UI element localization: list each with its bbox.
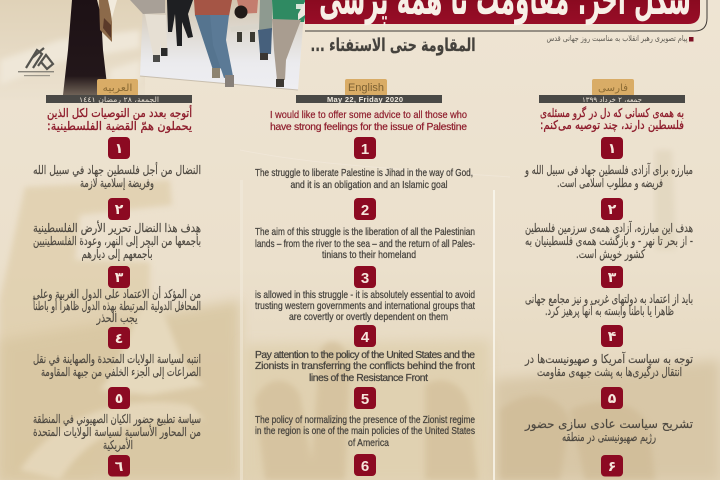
item 3: are covertly or overtly dependent on them <box>289 312 448 323</box>
item 1: and it is an obligation and an Islamic goal <box>290 180 448 191</box>
item 6: 6 <box>361 458 369 475</box>
item 6 <box>354 454 376 476</box>
item 5: سياسة تطبيع حضور الكيان الصهيوني في المنطقة <box>33 412 201 427</box>
item 1: 1 <box>361 141 369 158</box>
item 4: ۴ <box>608 329 617 345</box>
logo <box>18 48 54 76</box>
panel: Persian column <box>524 79 693 476</box>
person: second jeans with striped shirt <box>258 0 272 60</box>
language tab <box>345 79 387 96</box>
intro: I would like to offer some advice to all those who <box>270 110 467 121</box>
date bar <box>46 95 192 104</box>
item 4: انتبه لسياسة الولايات المتحدة والصهاينة في نقل <box>33 352 201 367</box>
item 2: ۲ <box>608 202 617 218</box>
person: jeans carrying stretcher <box>194 0 234 87</box>
item 1 <box>255 137 473 191</box>
item 5 <box>524 387 693 445</box>
item 3: ٣ <box>115 270 124 286</box>
intro: have strong feelings for the issue of Palestine <box>270 122 467 133</box>
person: dark trousers <box>167 0 193 46</box>
intro <box>540 106 684 133</box>
language tab <box>97 79 138 96</box>
intro <box>47 105 192 134</box>
item 1: فریضه و مطلوب اسلامی است. <box>557 176 663 191</box>
item 1 <box>524 137 693 191</box>
intro: يحملون همّ القضية الفلسطينية: <box>47 119 192 134</box>
item 3: من المؤكد أن الاعتماد على الدول الغربية وعلى <box>33 286 201 302</box>
item 3: trusting western governments and international groups that <box>255 301 475 312</box>
item 6 <box>108 455 130 476</box>
item 5: 5 <box>361 391 369 408</box>
item 3 <box>525 266 693 319</box>
language tab: العربيه <box>102 83 132 94</box>
item 2 <box>255 198 475 261</box>
item 3: يجب الحذر <box>96 311 138 326</box>
item 3 <box>255 266 475 323</box>
item 5: رژیم صهیونیستی در منطقه <box>562 430 656 445</box>
item 4: ٤ <box>115 331 123 347</box>
date bar: May 22, Friday 2020 <box>327 95 403 104</box>
item 1: ۱ <box>608 141 616 157</box>
item 6 <box>601 455 623 476</box>
date bar: جمعه، ۲ خرداد ۱۳۹۹ <box>582 96 642 104</box>
item 4 <box>255 325 475 384</box>
item 3: 3 <box>361 270 369 287</box>
photo: woman in black with flag <box>63 0 117 95</box>
item 5: من المحاور الأساسية لسياسة الولايات المتحدة <box>33 424 201 440</box>
panel: Arabic column <box>33 79 201 476</box>
person: white trousers <box>130 0 168 62</box>
item 5: in the region is one of the main policies of the United States <box>255 426 475 437</box>
intro: فلسطین دارند، چند توصیه می‌کنم: <box>540 118 684 133</box>
item 2: lands – from the river to the sea – and the return of all Pales- <box>255 239 475 250</box>
item 1: The struggle to liberate Palestine is Jihad in the way of God, <box>255 168 473 179</box>
intro: أتوجه بعدد من التوصيات لكل الذين <box>47 105 192 121</box>
item 2: tinians to their homeland <box>322 250 416 261</box>
item 5: تشریح سیاست عادی سازی حضور <box>524 417 693 432</box>
person: green vest <box>272 0 316 87</box>
item 2: ٢ <box>115 202 124 218</box>
item 2 <box>33 198 201 262</box>
item 4 <box>33 327 201 380</box>
caption with bullet: پیام تصویری رهبر انقلاب به مناسبت روز جهانی قدس <box>546 34 688 43</box>
item 4: lines of the Resistance Front <box>309 373 428 384</box>
item 4: Zionists in transferring the conflicts behind the front <box>255 361 475 372</box>
item 3: is allowed in this struggle - it is absolutely essential to avoid <box>255 290 475 301</box>
item 4: الصراعات إلى الجزء الخلفي من جبهة المقاومة <box>41 365 201 380</box>
language tab <box>592 79 634 96</box>
item 2 <box>525 198 693 262</box>
item 2: کشور خویش است. <box>576 247 645 262</box>
item 3: المحافل الدولية المرتبطة بهذه الدول ظاهراً أو باطناً <box>33 297 201 314</box>
item 4: Pay attention to the policy of the United States and the <box>255 350 475 361</box>
item 3: ۳ <box>608 270 617 286</box>
item 2: بأجمعها من البحر إلى النهر، وعودة الفلسطينيين <box>33 232 201 249</box>
intro <box>270 110 467 133</box>
subtitle: المقاومة حتى الاستفتاء ... <box>310 35 476 56</box>
item 5: The policy of normalizing the presence of the Zionist regime <box>255 415 475 426</box>
item 5: ۵ <box>608 391 617 407</box>
item 5 <box>255 387 475 449</box>
patient on stretcher <box>230 0 264 42</box>
item 6: ٦ <box>115 459 124 475</box>
item 2: بأجمعهم إلى ديارهم <box>82 245 152 262</box>
item 1: وفريضة إسلامية لازمة <box>80 176 154 191</box>
item 1: ١ <box>115 141 123 157</box>
date bar: الجمعة، ٢٨ رمضان ١٤٤١ <box>79 96 159 104</box>
item 5: of America <box>348 438 389 449</box>
item 4: 4 <box>361 329 370 346</box>
item 2: هدف هذا النضال تحرير الأرض الفلسطينية <box>33 220 201 236</box>
item 1: النضال من أجل فلسطين جهاد في سبيل الله <box>33 162 201 178</box>
title banner <box>305 0 707 31</box>
item 2: The aim of this struggle is the liberation of all the Palestinian <box>255 227 475 238</box>
item 1 <box>33 137 201 191</box>
date bar <box>539 95 685 104</box>
item 5: ٥ <box>115 391 123 407</box>
panel: English column <box>255 79 475 476</box>
item 4 <box>524 325 693 380</box>
item 5: الأمريكية <box>103 437 133 453</box>
photo: stretcher group on torn white panel <box>130 0 316 90</box>
item 6: ۶ <box>608 459 616 475</box>
language tab: English <box>348 82 384 94</box>
item 2: 2 <box>361 202 369 219</box>
language tab: فارسی <box>598 83 628 94</box>
date bar <box>296 95 442 104</box>
item 5 <box>33 387 201 453</box>
item 3 <box>33 266 201 326</box>
